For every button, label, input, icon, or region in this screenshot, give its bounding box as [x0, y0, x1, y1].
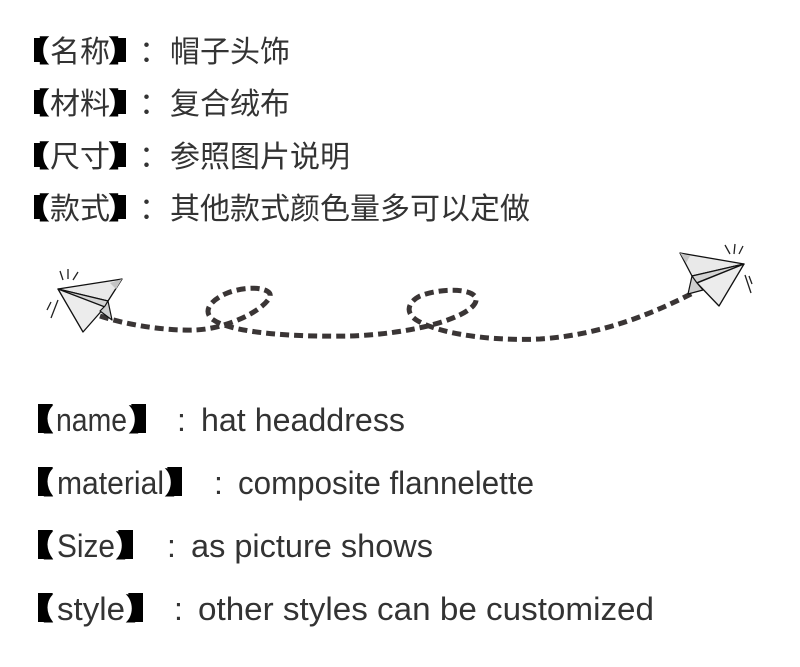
Chinese spec: size: ：: [139, 141, 169, 174]
Chinese spec: size: 】: [108, 132, 138, 176]
Chinese spec: material: [20, 79, 290, 123]
Chinese spec: style: [20, 184, 530, 228]
icon: left paper plane: [47, 269, 122, 332]
Chinese spec: material: ：: [139, 88, 169, 121]
English spec: material: material: [57, 465, 164, 501]
English spec: name: [24, 396, 405, 440]
English spec: name: hat headdress: [201, 402, 405, 438]
English spec: style: 【: [24, 585, 54, 629]
Chinese spec: name: 帽子头饰: [170, 36, 290, 69]
English spec: style: [24, 585, 654, 629]
Chinese spec: name: 名称: [50, 36, 110, 69]
English spec: size: [24, 522, 433, 566]
Chinese spec: name: 【: [20, 27, 50, 71]
Chinese spec: style: 款式: [50, 193, 110, 226]
Chinese spec: size: 参照图片说明: [170, 141, 350, 174]
English spec: style: other styles can be customized: [198, 591, 654, 627]
English spec: name: name: [56, 402, 127, 438]
English spec: name: :: [177, 402, 186, 438]
English spec: material: 【: [24, 459, 54, 503]
icon: right paper plane: [680, 244, 752, 306]
English spec: size: :: [167, 528, 176, 564]
English spec: material: composite flannelette: [238, 465, 534, 501]
English spec: size: 【: [24, 522, 54, 566]
Chinese spec: name: [20, 27, 290, 71]
Chinese spec: name: ：: [139, 36, 169, 69]
Chinese spec: size: 【: [20, 132, 50, 176]
Chinese spec: material: 【: [20, 79, 50, 123]
English spec: size: as picture shows: [191, 528, 433, 564]
English spec: name: 【: [24, 396, 54, 440]
English spec: style: style: [57, 591, 125, 627]
Chinese spec: material: 材料: [50, 88, 110, 121]
Chinese spec: name: 】: [108, 27, 138, 71]
Chinese spec: size: [20, 132, 350, 176]
Chinese spec: style: ：: [139, 193, 169, 226]
dashed flight path with loops: [100, 288, 695, 339]
English spec: style: 】: [125, 585, 155, 629]
Chinese spec: style: 其他款式颜色量多可以定做: [170, 193, 530, 226]
Chinese spec: style: 【: [20, 184, 50, 228]
English spec: size: Size: [57, 528, 115, 564]
English spec: material: :: [214, 465, 223, 501]
English spec: size: 】: [115, 522, 145, 566]
English spec: material: 】: [164, 459, 194, 503]
English spec: style: :: [174, 591, 183, 627]
Chinese spec: size: 尺寸: [50, 141, 110, 174]
Chinese spec: material: 】: [108, 79, 138, 123]
Chinese spec: style: 】: [108, 184, 138, 228]
English spec: name: 】: [128, 396, 158, 440]
English spec: material: [24, 459, 534, 503]
Chinese spec: material: 复合绒布: [170, 88, 290, 121]
